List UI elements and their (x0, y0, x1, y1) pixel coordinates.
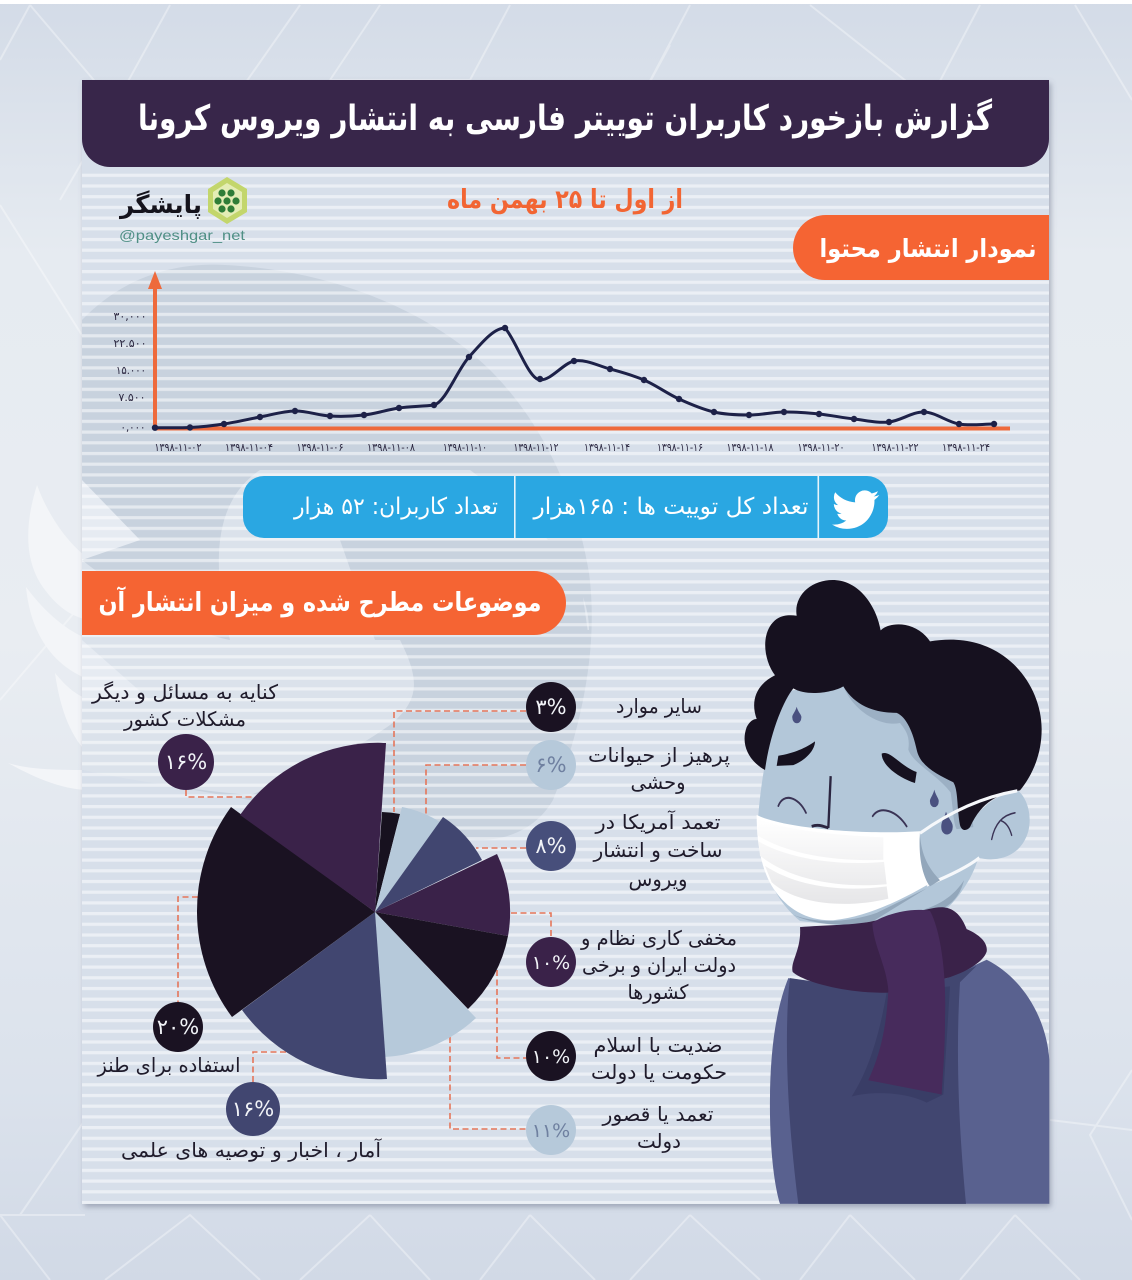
item: 20% humor: استفاده برای طنز (97, 1053, 240, 1077)
eyebrows (777, 741, 917, 783)
item: 10% anti-Islam: ضدیت با اسلام (594, 1033, 722, 1057)
item: 6% wild animals: وحشی (630, 770, 686, 794)
y axis labels: ۱۵.۰۰۰ (116, 364, 146, 377)
nose (812, 776, 831, 828)
x axis date labels: ۱۳۹۸-۱۱-۱۰ (443, 441, 487, 454)
ear detail (992, 813, 1015, 839)
title bar (82, 80, 1049, 167)
x axis date labels (154, 441, 990, 454)
icon: hexagon logo (208, 177, 247, 224)
item: 8% US (526, 809, 722, 891)
x axis date labels: ۱۳۹۸-۱۱-۱۸ (726, 441, 774, 454)
item: 6% wild animals (526, 740, 730, 794)
heading chip: topics (82, 571, 566, 635)
item: 11% government negligence: دولت (637, 1129, 681, 1153)
neck and face (758, 686, 1030, 929)
x axis date labels: ۱۳۹۸-۱۱-۲۴ (942, 441, 990, 454)
body (770, 960, 1049, 1204)
y axis arrow (148, 271, 162, 429)
item: 10% anti-Islam: ۱۰% (532, 1046, 570, 1068)
face shadow (843, 686, 973, 829)
item: 8% US: تعمد آمریکا در (594, 809, 720, 834)
item: 16% science (121, 1082, 382, 1162)
item: 20% humor (97, 1002, 240, 1077)
line chart (114, 271, 1010, 454)
x axis date labels: ۱۳۹۸-۱۱-۰۴ (225, 441, 273, 454)
item: 10% concealment: ۱۰% (532, 952, 570, 974)
sweat drops (792, 707, 953, 834)
y axis labels: ۲۲.۵۰۰ (114, 337, 146, 350)
scarf shadow (852, 986, 950, 1103)
y axis labels: ۳۰,۰۰۰ (114, 310, 146, 323)
item: 16% science: آمار ، اخبار و توصیه های علمی (121, 1137, 382, 1162)
item: 3% other: ۳% (535, 695, 567, 719)
stats bar (243, 476, 888, 538)
item: 10% anti-Islam (526, 1031, 727, 1084)
illustration: sick man with mask (745, 580, 1049, 1204)
item: 11% government negligence (526, 1102, 714, 1155)
torso shade (787, 966, 977, 1204)
item: 16% sarcasm: ۱۶% (165, 750, 207, 774)
y axis labels: ۰,۰۰۰ (120, 421, 146, 434)
x axis date labels: ۱۳۹۸-۱۱-۰۶ (296, 441, 344, 454)
heading chip: content chart (793, 215, 1049, 280)
mask shade (793, 835, 940, 924)
y axis labels (114, 310, 146, 434)
scarf (792, 907, 987, 993)
stat: total tweets: تعداد کل توییت ها : ۱۶۵هزار (532, 494, 808, 520)
logo handle: @payeshgar_net (119, 227, 245, 243)
y axis labels: ۷.۵۰۰ (118, 391, 146, 404)
neck shadow (920, 880, 964, 913)
x axis date labels: ۱۳۹۸-۱۱-۱۲ (514, 441, 559, 454)
item: 3% other: سایر موارد (616, 694, 702, 718)
x axis date labels: ۱۳۹۸-۱۱-۰۸ (367, 441, 415, 454)
item: 16% sarcasm (91, 680, 278, 790)
heading chip: topics: موضوعات مطرح شده و میزان انتشار آن (98, 586, 542, 618)
logo wordmark: پایشگر (118, 190, 202, 220)
mask straps (920, 791, 1017, 885)
x axis date labels: ۱۳۹۸-۱۱-۱۶ (657, 441, 703, 454)
item: 16% sarcasm: مشکلات کشور (123, 707, 246, 731)
item: 8% US: ساخت و انتشار (592, 838, 722, 862)
x axis date labels: ۱۳۹۸-۱۱-۰۲ (154, 441, 202, 454)
mask folds (757, 819, 888, 904)
item: 16% sarcasm: کنایه به مسائل و دیگر (91, 680, 278, 704)
x axis date labels: ۱۳۹۸-۱۱-۲۰ (798, 441, 844, 454)
item: 10% concealment: دولت ایران و برخی (582, 953, 736, 977)
logo: payeshgar (118, 177, 247, 243)
item: 11% government negligence: ۱۱% (532, 1120, 570, 1142)
x axis date labels: ۱۳۹۸-۱۱-۲۲ (872, 441, 919, 454)
subtitle: date range: از اول تا ۲۵ بهمن ماه (447, 185, 683, 215)
item: 16% science: ۱۶% (232, 1097, 274, 1121)
item: 10% concealment: مخفی کاری نظام و (580, 926, 737, 950)
x axis (155, 426, 1010, 430)
item: 6% wild animals: پرهیز از حیوانات (588, 743, 730, 768)
item: 11% government negligence: تعمد یا قصور (601, 1102, 714, 1126)
x axis date labels: ۱۳۹۸-۱۱-۱۴ (584, 441, 630, 454)
pie chart (197, 743, 510, 1079)
icon: twitter bird (832, 490, 879, 529)
item: 8% US: ویروس (628, 867, 688, 891)
heading chip: content chart: نمودار انتشار محتوا (820, 234, 1036, 264)
eyes (778, 798, 907, 826)
item: 20% humor: ۲۰% (157, 1015, 199, 1039)
hair (745, 580, 1042, 830)
item: 6% wild animals: ۶% (535, 753, 567, 777)
stat: users: تعداد کاربران: ۵۲ هزار (293, 494, 498, 520)
connector lines (178, 711, 551, 1129)
item: 8% US: ۸% (535, 834, 567, 858)
watermark: bird wings outside panel (8, 485, 90, 790)
data line (155, 328, 994, 428)
item: 10% concealment (526, 926, 737, 1004)
mask (757, 815, 928, 920)
data points (152, 325, 997, 431)
watermark: bird body inside panel (82, 265, 592, 840)
item: 3% other (526, 682, 702, 732)
scarf tail (868, 910, 945, 1094)
panel: main striped card (82, 80, 1049, 1204)
item: 10% concealment: کشورها (628, 980, 689, 1004)
panel stripes (82, 167, 1049, 1204)
item: 10% anti-Islam: حکومت یا دولت (591, 1060, 727, 1084)
